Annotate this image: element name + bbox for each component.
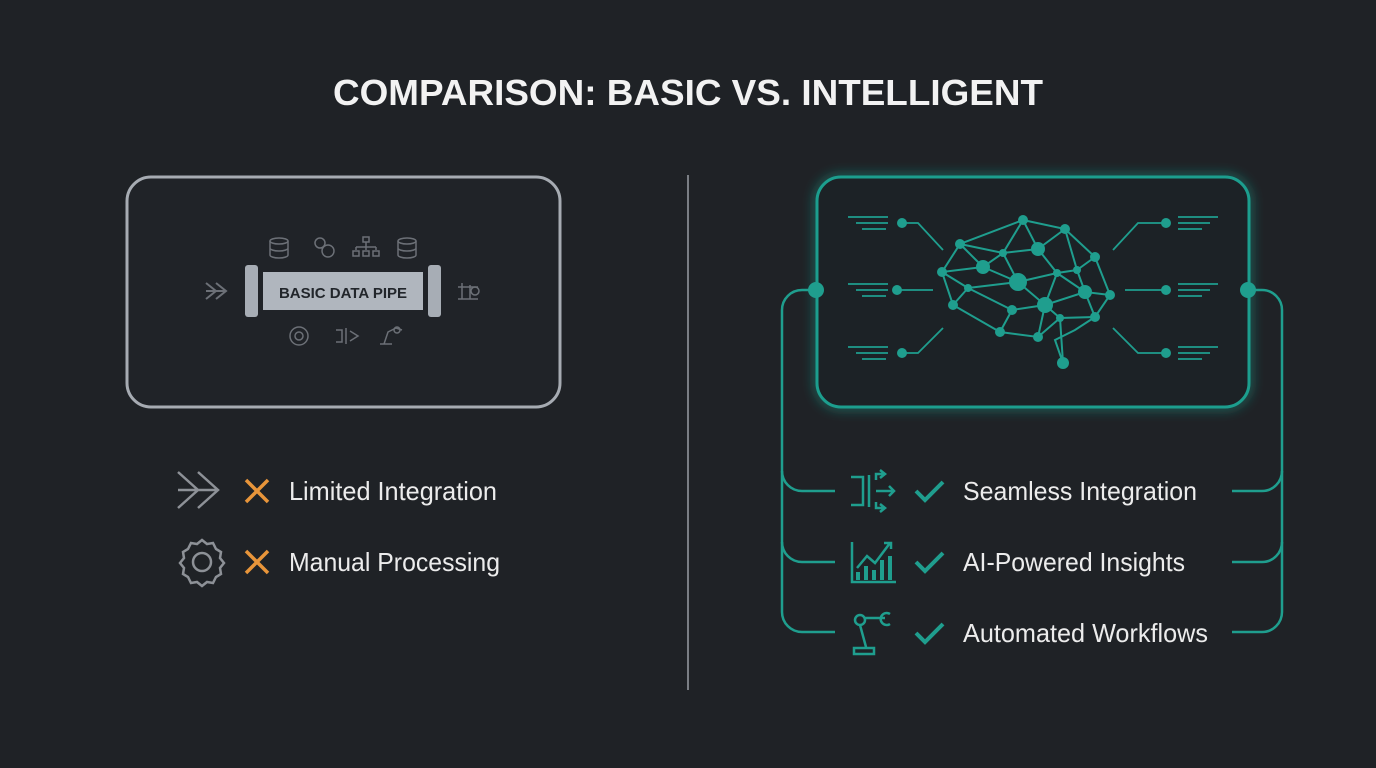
- icon: chart: [852, 542, 896, 582]
- check: [916, 482, 943, 500]
- right list: [851, 470, 1208, 654]
- icon: gear: [180, 540, 224, 586]
- left list: Limited Integration: [289, 476, 497, 506]
- icon: arrows: [178, 472, 218, 508]
- right list: Seamless Integration: [963, 476, 1197, 506]
- panel: intelligent: [782, 177, 1282, 632]
- connectors: [782, 290, 1282, 632]
- pipe: [245, 265, 441, 317]
- pipe: BASIC DATA PIPE: [279, 285, 407, 302]
- x mark: [246, 480, 268, 502]
- left list: [178, 472, 500, 586]
- left list: Manual Processing: [289, 547, 500, 577]
- icon: integration: [851, 470, 894, 512]
- icon: input arrows: [206, 283, 226, 299]
- brain network: [942, 220, 1110, 363]
- side data labels: [848, 217, 1218, 359]
- panel: basic data pipe: [127, 177, 560, 407]
- right list: AI-Powered Insights: [963, 547, 1185, 577]
- divider: [687, 175, 689, 690]
- icon: robot arm: [854, 613, 890, 654]
- title: COMPARISON: BASIC VS. INTELLIGENT: [333, 72, 1043, 113]
- right list: Automated Workflows: [963, 618, 1208, 648]
- icons: pipe decorations: [270, 237, 479, 345]
